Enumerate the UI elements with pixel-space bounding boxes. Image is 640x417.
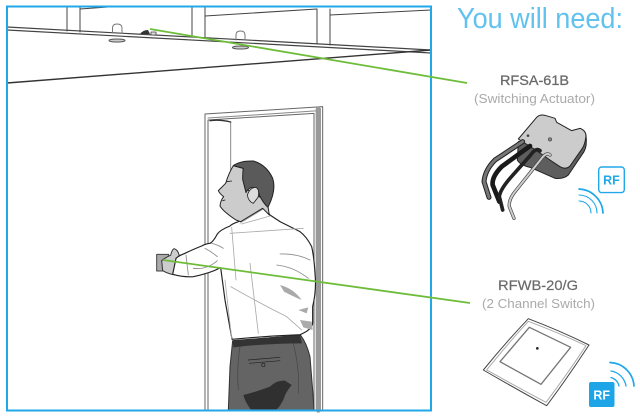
icon: RF badge filled: RF [593, 388, 610, 402]
label: RFSA-61B: RFSA-61B [500, 72, 569, 88]
icon: RF badge filled [589, 382, 614, 407]
shirt [173, 208, 315, 339]
scene illustration: room with man at door [7, 7, 431, 410]
belt [233, 335, 302, 347]
shirt shadow folds [280, 285, 313, 330]
heading: You will need: [457, 3, 623, 35]
label: switching actuator: (Switching Actuator) [474, 92, 595, 106]
leader line to switch [163, 260, 470, 303]
ear [247, 187, 259, 203]
label: RFWB-20/G: RFWB-20/G [498, 277, 578, 293]
ceiling structure [7, 7, 431, 83]
wall switch [157, 254, 169, 271]
icon: wall switch device [483, 319, 589, 406]
icon: wireless waves actuator [579, 189, 603, 213]
actuator body side [517, 135, 586, 179]
icon: RF badge outline [599, 167, 624, 193]
shirt fold lines [186, 210, 310, 338]
ceiling lamp right [232, 31, 248, 49]
blue frame [7, 6, 431, 410]
trousers [228, 335, 314, 410]
eye and mouth [223, 181, 232, 201]
icon: wireless waves switch [610, 362, 634, 386]
hand [162, 249, 187, 275]
icon: RF badge outline: RF [603, 174, 620, 188]
ceiling lamp left [109, 24, 125, 42]
actuator top [518, 115, 586, 168]
ceiling mounted actuator [140, 30, 156, 35]
trouser shadow [243, 381, 292, 409]
wires [484, 142, 550, 218]
neck and face [218, 166, 269, 222]
door frame [205, 107, 323, 410]
pocket [248, 357, 280, 363]
hair [233, 161, 274, 207]
icon: switching actuator device [484, 115, 586, 218]
leader line to actuator [150, 29, 467, 83]
label: 2 channel switch: (2 Channel Switch) [482, 297, 595, 311]
man [157, 161, 315, 410]
